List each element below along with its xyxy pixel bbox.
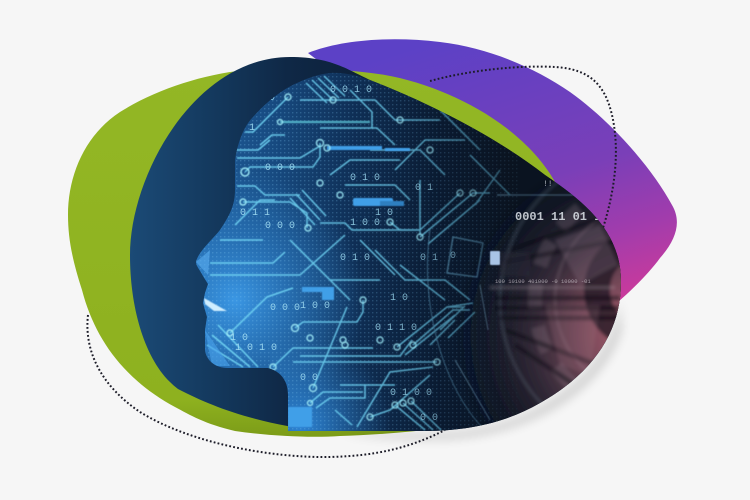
- binary digits: 0 1 0: [245, 93, 275, 104]
- binary digits: 0 0: [300, 373, 318, 384]
- circuit bright pads: [288, 146, 410, 427]
- dot grid: [190, 60, 520, 440]
- illustration: AI head on organic blobs: [68, 39, 677, 458]
- binary digits: 1 0 1 0: [235, 343, 277, 354]
- binary digits: 0 1 0: [350, 173, 380, 184]
- data readout: 0001 11 01 1: [515, 210, 601, 224]
- binary digits: [225, 85, 456, 424]
- binary digits: 0 0 0: [265, 221, 295, 232]
- binary digits: 0 1 0: [340, 253, 370, 264]
- binary digits: 0 0: [420, 413, 438, 424]
- chin highlight: [205, 330, 230, 366]
- blob: purple: [308, 39, 677, 302]
- binary digits: 1 0: [375, 208, 393, 219]
- tech dial: right glow: [468, 182, 621, 420]
- blob shadow: [340, 300, 622, 440]
- binary digits: 0 1: [420, 253, 438, 264]
- head silhouette with circuit board: [196, 72, 621, 431]
- circuit nodes: [227, 94, 476, 420]
- binary digits: 0 1 0 0: [390, 388, 432, 399]
- blob: dark navy: [130, 57, 621, 431]
- dotted outline: upper right: [430, 67, 616, 228]
- binary digits: 0: [450, 251, 456, 262]
- nose highlight: [196, 250, 210, 275]
- binary digits: 0 0 0: [265, 163, 295, 174]
- binary digits: 0 1: [415, 183, 433, 194]
- data row: 100 10100 401000 -0 10000 -01: [495, 278, 591, 285]
- neck glow: [270, 350, 384, 431]
- face glow: [196, 186, 357, 390]
- digits top right: !!: [543, 180, 553, 189]
- chip highlight: [490, 251, 500, 265]
- binary digits: 0 0 0: [270, 303, 300, 314]
- binary digits: 0 1 1: [240, 208, 270, 219]
- digits lower right: 10: [592, 360, 602, 369]
- binary digits: 1 0: [390, 293, 408, 304]
- binary digits: 1 0 0: [350, 218, 380, 229]
- binary digits: 1 0: [230, 333, 248, 344]
- binary digits: 0 1 1 0: [375, 323, 417, 334]
- binary digits: 0 0 1: [225, 123, 255, 134]
- dotted outline: lower left: [87, 315, 445, 457]
- face highlights: [204, 298, 227, 311]
- binary digits: 0 0 1 0: [330, 85, 372, 96]
- circuit traces: [207, 76, 590, 430]
- blob: green: [68, 68, 562, 437]
- head fill: [190, 60, 630, 440]
- binary digits: 1 0 0: [300, 301, 330, 312]
